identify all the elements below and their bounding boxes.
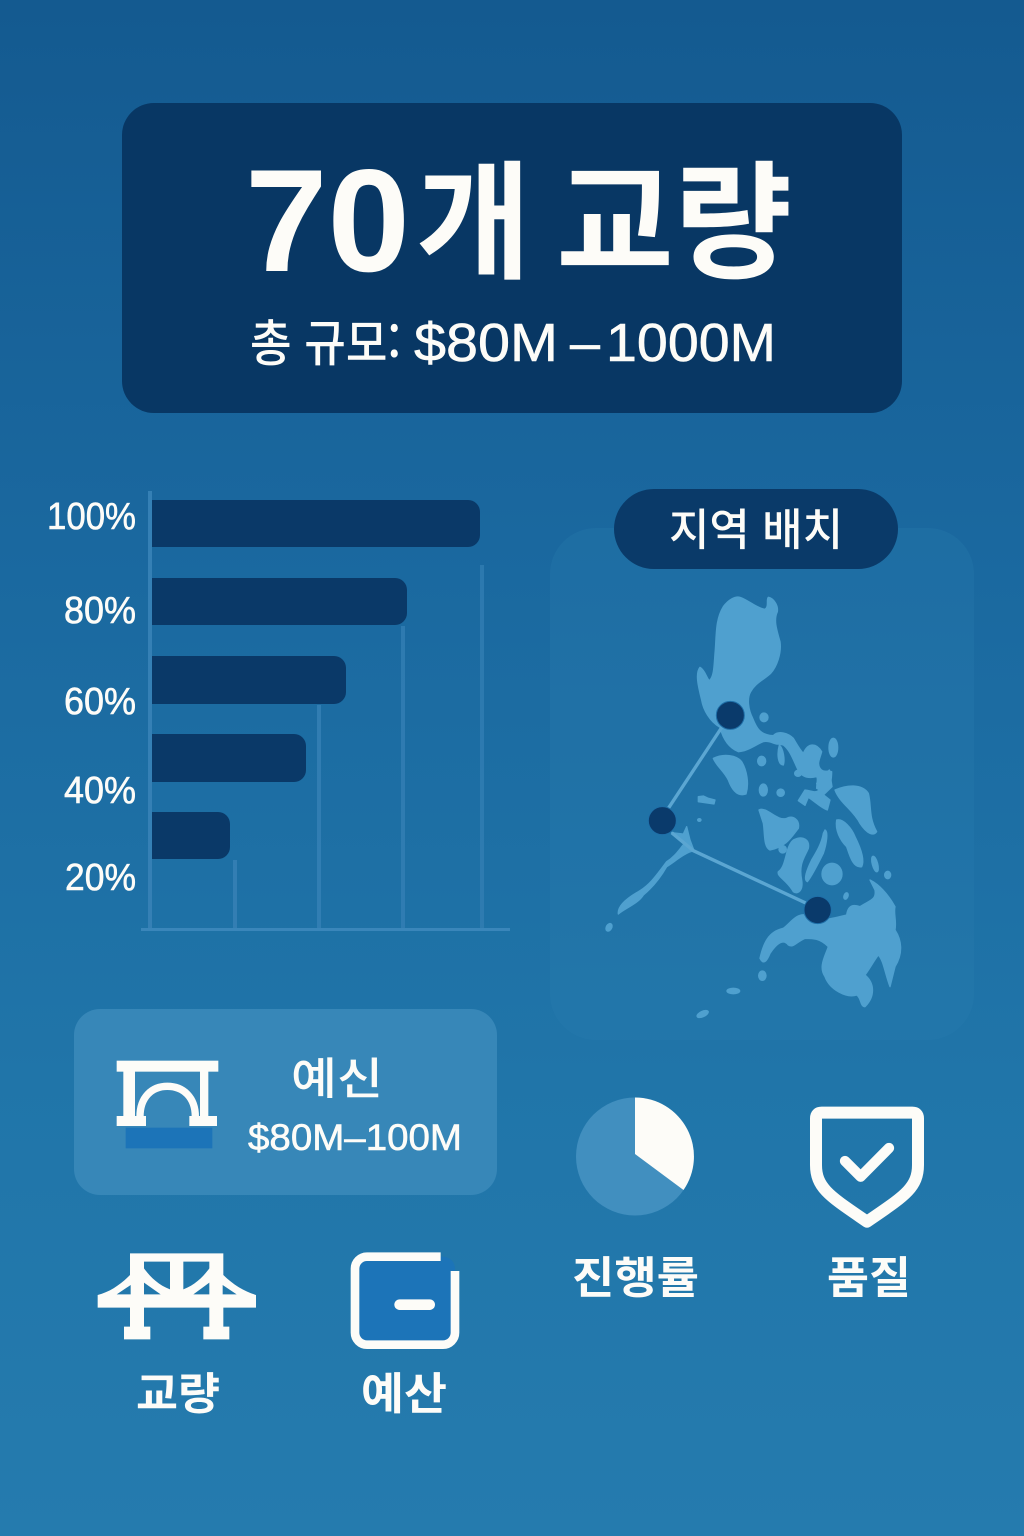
bar 80%: [152, 578, 407, 625]
location marker south: [804, 896, 831, 924]
label: progress: 진행률: [572, 1242, 699, 1306]
subtitle: total scale: –: [570, 313, 600, 373]
budget card: [74, 1009, 497, 1195]
bar 20%: [152, 812, 230, 859]
icon: arch bridge: [117, 1061, 218, 1148]
panel: regional map: [550, 489, 974, 1040]
connector lines: [668, 725, 810, 905]
subtitle: total scale: $80M: [414, 313, 558, 373]
label: budget: 예산: [361, 1358, 447, 1422]
card amount: $80M–100M: [248, 1117, 462, 1158]
location marker west: [648, 807, 676, 835]
title: 70 bridges: 교량: [556, 120, 792, 305]
bar 100%: [152, 500, 480, 547]
title: 70 bridges: 개: [416, 120, 531, 305]
pill heading: regional placement: [614, 489, 898, 569]
bar 60%: [152, 656, 346, 704]
title panel: [122, 103, 902, 413]
axis label 80%: 80%: [64, 590, 136, 632]
location marker north: [716, 701, 744, 729]
label: bridges: 교량: [136, 1358, 220, 1422]
label: quality: 품질: [827, 1242, 911, 1306]
subtitle: total scale: [250, 304, 776, 376]
subtitle: total scale: 1000M: [606, 313, 776, 373]
title: 70 bridges: [245, 120, 792, 305]
pie chart: progress with label: [572, 1098, 699, 1306]
card heading: 예신: [291, 1043, 383, 1107]
axis label 40%: 40%: [64, 770, 136, 812]
icon: wallet budget with label: [355, 1257, 455, 1422]
pill heading: regional placement: 지역 배치: [669, 494, 843, 558]
bar chart: [47, 491, 510, 931]
axis label 100%: 100%: [47, 496, 136, 538]
bar 40%: [152, 734, 306, 782]
icon: suspension bridge with label: [98, 1253, 256, 1422]
subtitle: total scale: 총 규모:: [250, 304, 401, 376]
axis label 60%: 60%: [64, 681, 136, 723]
map of the Philippines: [605, 597, 901, 1019]
axis label 20%: 20%: [65, 857, 136, 899]
icon: quality shield with label: [816, 1113, 918, 1306]
title: 70 bridges: 70: [245, 139, 410, 302]
